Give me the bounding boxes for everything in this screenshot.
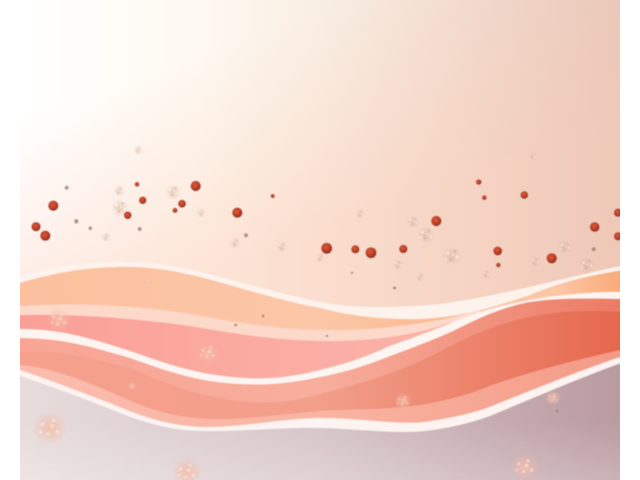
orange wave <box>20 266 466 330</box>
lower sparkle clusters <box>33 278 561 480</box>
faint sparkle clusters <box>101 145 595 282</box>
white wave band, bottom <box>20 356 620 432</box>
orange wedge, right side <box>480 270 620 312</box>
upper peach background <box>10 0 630 307</box>
deep salmon inner wave <box>20 310 620 420</box>
white wave band, top <box>20 261 620 320</box>
white wave band, middle <box>20 291 620 386</box>
pale peach band <box>20 304 480 342</box>
pink wave <box>20 314 454 379</box>
red droplets <box>31 179 622 267</box>
small grey specks <box>65 186 596 412</box>
salmon upper wave <box>64 298 620 402</box>
light salmon wave <box>20 349 620 428</box>
lower lilac background <box>20 362 620 480</box>
